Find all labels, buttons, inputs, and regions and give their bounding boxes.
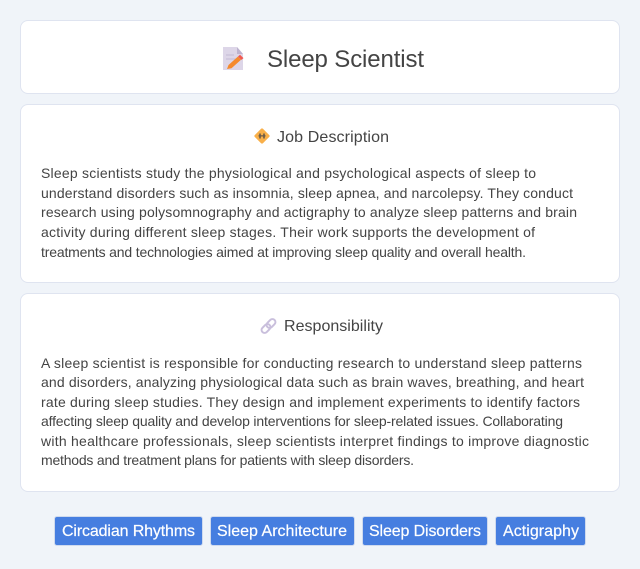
heading: Responsibility: Responsibility (284, 318, 383, 335)
tag label: Actigraphy: Actigraphy (503, 523, 579, 540)
tag label: Sleep Disorders: Sleep Disorders (369, 523, 481, 540)
text block: responsibility: affecting sleep quality and develop interventions for sleep-related issues. Collaborating (41, 413, 563, 429)
tag label: Sleep Architecture: Sleep Architecture (217, 523, 347, 540)
icon: construction diamond (254, 128, 270, 144)
text block: job description: treatments and technologies aimed at improving sleep quality and overall health. (41, 244, 526, 260)
text block: responsibility (40, 355, 589, 468)
tag: Circadian Rhythms background (54, 516, 203, 546)
icon: link (260, 318, 277, 334)
text block: responsibility: A sleep scientist is responsible for conducting research to understand sleep patterns (41, 355, 582, 371)
tag: Sleep Disorders background (362, 516, 488, 546)
text block: responsibility: with healthcare professionals, sleep scientists interpret findings to improve diagnostic (40, 433, 589, 449)
text block: job description: activity during different sleep stages. Their work supports the development of (41, 224, 535, 240)
tag: Actigraphy background (495, 516, 586, 546)
panel: responsibility card (20, 293, 620, 492)
text block: job description: research using polysomnography and actigraphy to analyze sleep patterns and brain (41, 204, 577, 220)
icon: document with pencil (223, 47, 244, 70)
panel: job description card (20, 104, 620, 283)
text block: responsibility: methods and treatment plans for patients with sleep disorders. (41, 452, 414, 468)
text block: job description: Sleep scientists study the physiological and psychological aspects of sleep to (41, 165, 536, 181)
tag: Sleep Architecture background (210, 516, 355, 546)
title: Sleep Scientist (267, 46, 424, 73)
text block: job description (41, 165, 577, 260)
text block: job description: understand disorders such as insomnia, sleep apnea, and narcolepsy. They conduct (41, 185, 573, 201)
text block: responsibility: rate during sleep studies. They design and implement experiments to identify factors (41, 394, 580, 410)
heading: Job Description: Job Description (277, 129, 389, 146)
text block: responsibility: and disorders, analyzing physiological data such as brain waves, breathing, and heart (41, 374, 584, 390)
panel: title card (20, 20, 620, 94)
tag label: Circadian Rhythms: Circadian Rhythms (62, 523, 195, 540)
